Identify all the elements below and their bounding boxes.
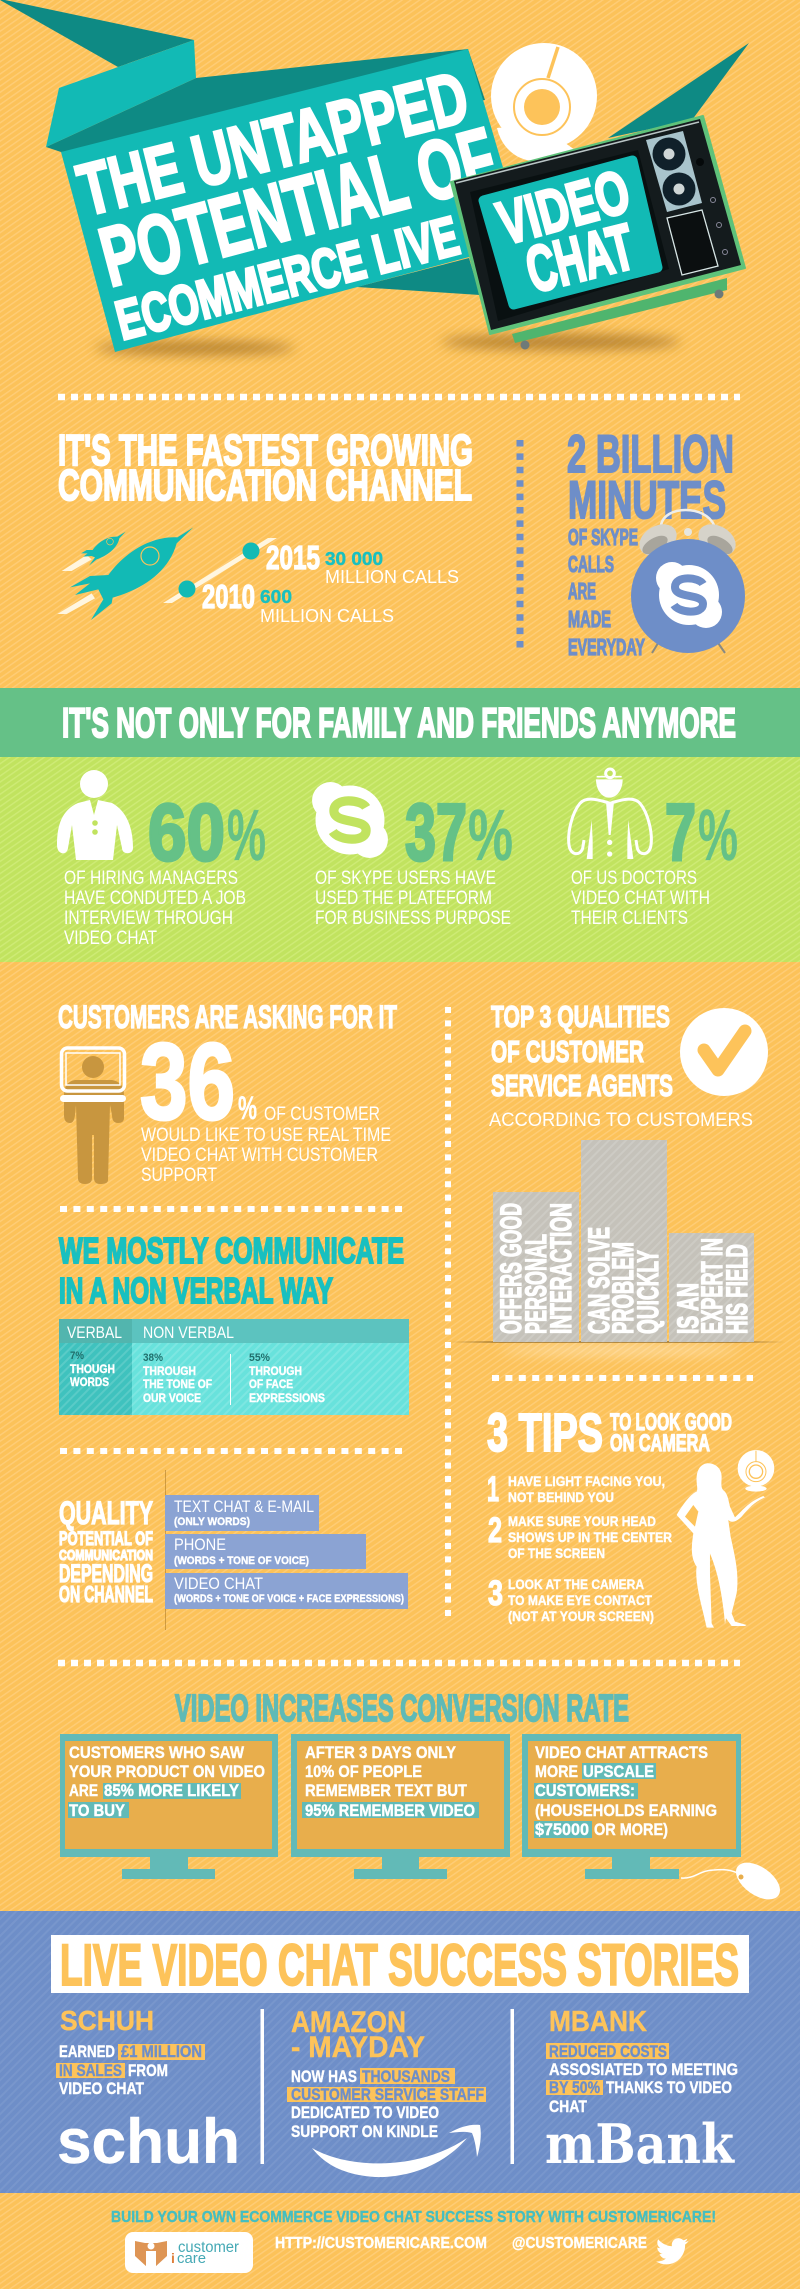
text: OF SKYPE xyxy=(568,524,638,550)
heading: COMMUNICATION xyxy=(59,1547,153,1564)
panel: success stories xyxy=(0,1911,800,2193)
divider xyxy=(492,1375,753,1381)
table: VERBAL xyxy=(67,1323,122,1342)
monitor 3: $75000 xyxy=(535,1821,589,1839)
story: schuh: VIDEO CHAT xyxy=(59,2079,145,2098)
heading xyxy=(59,1230,404,1311)
panel: quality by channel xyxy=(59,1470,408,1630)
stat: 2015: 30 000 xyxy=(325,549,383,569)
monitor 2: 10% OF PEOPLE xyxy=(305,1763,422,1781)
bar: text chat: (ONLY WORDS) xyxy=(174,1516,250,1528)
stat: hiring managers xyxy=(57,770,266,949)
logo: customer i care: customer xyxy=(178,2239,239,2256)
icon: person behind monitor xyxy=(60,1048,126,1184)
main banner xyxy=(61,49,525,352)
heading: TOP 3 QUALITIES xyxy=(491,999,670,1034)
heading: QUALITY xyxy=(59,1495,153,1531)
bar: text chat xyxy=(165,1495,319,1531)
story: amazon: NOW HAS xyxy=(291,2067,357,2086)
story: mbank: CHAT xyxy=(549,2097,588,2116)
panel: video increases conversion xyxy=(60,1688,787,1907)
divider xyxy=(58,394,740,400)
stat: skype users: % xyxy=(468,796,513,876)
heading: POTENTIAL OF xyxy=(59,1529,153,1550)
bar chart: HIS FIELD xyxy=(721,1244,754,1334)
tip 2: OF THE SCREEN xyxy=(508,1546,605,1561)
text: ARE xyxy=(568,578,596,604)
banner shadows xyxy=(95,334,681,355)
heading: ON CHANNEL xyxy=(59,1581,153,1607)
monitor 3: CUSTOMERS: xyxy=(535,1782,635,1800)
stat: 36%: WOULD LIKE TO USE REAL TIME xyxy=(141,1125,391,1146)
bar chart: OFFERS GOOD xyxy=(495,1203,528,1334)
monitor 3: OR MORE) xyxy=(594,1821,668,1839)
table: THROUGH xyxy=(143,1364,196,1378)
stat: 2010 xyxy=(202,578,394,626)
monitor 1: 85% MORE LIKELY xyxy=(104,1782,239,1800)
title text: THE UNTAPPED xyxy=(70,57,476,232)
call to action: BUILD YOUR OWN ECOMMERCE VIDEO CHAT SUCCESS STORY WITH CUSTOMERICARE! xyxy=(111,2209,716,2226)
stat: hiring managers: VIDEO CHAT xyxy=(64,928,157,949)
table: OUR VOICE xyxy=(143,1391,201,1405)
stat: 36% xyxy=(140,1021,391,1186)
monitor 1: CUSTOMERS WHO SAW xyxy=(69,1744,244,1762)
monitor 1: ARE xyxy=(69,1782,98,1800)
table: EXPRESSIONS xyxy=(249,1391,325,1405)
tip 3: 3 xyxy=(488,1574,503,1613)
story: mbank: REDUCED COSTS xyxy=(549,2042,667,2061)
stat: 36%: 36 xyxy=(140,1021,235,1143)
bar chart: CAN SOLVE xyxy=(583,1227,616,1334)
ribbon folds xyxy=(0,0,749,295)
stat: doctors: THEIR CLIENTS xyxy=(571,908,688,929)
story: schuh: £1 MILLION xyxy=(121,2042,202,2061)
tip 1: NOT BEHIND YOU xyxy=(508,1490,614,1505)
stat: 36%: SUPPORT xyxy=(141,1165,217,1186)
stat: 2015: MILLION CALLS xyxy=(325,567,459,587)
story: mbank: ASSOSIATED TO MEETING xyxy=(549,2060,738,2079)
bar chart: EXPERT IN xyxy=(696,1238,729,1334)
bar chart: QUICKLY xyxy=(632,1250,665,1334)
stat: doctors: OF US DOCTORS xyxy=(571,868,697,889)
divider xyxy=(60,1206,402,1212)
story: amazon xyxy=(287,2006,486,2177)
bar chart xyxy=(450,1140,785,1356)
stat: 2015: 2015 xyxy=(266,539,320,576)
monitor 2: AFTER 3 DAYS ONLY xyxy=(305,1744,456,1762)
monitor 2: 95% REMEMBER VIDEO xyxy=(305,1802,475,1820)
monitor 1 xyxy=(60,1734,278,1879)
tip 3 xyxy=(488,1574,654,1624)
logo: amazon smile xyxy=(312,2125,481,2177)
logo: customer i care: care xyxy=(177,2250,206,2267)
table: THOUGH xyxy=(70,1362,115,1376)
stat: hiring managers: % xyxy=(227,796,266,876)
table: THROUGH xyxy=(249,1364,302,1378)
panel: fastest growing channel xyxy=(57,426,473,626)
tip 2: MAKE SURE YOUR HEAD xyxy=(508,1514,656,1529)
story: mbank: BY 50% xyxy=(549,2078,600,2097)
story: schuh: EARNED xyxy=(59,2042,115,2061)
story: amazon: THOUSANDS xyxy=(362,2067,450,2086)
stat: skype users: 37 xyxy=(405,788,467,878)
logo: schuh: schuh xyxy=(57,2107,240,2177)
panel: customers asking xyxy=(58,999,397,1186)
stat: 2010: MILLION CALLS xyxy=(260,606,394,626)
stat: skype users: FOR BUSINESS PURPOSE xyxy=(315,908,511,929)
tip 2 xyxy=(488,1511,672,1561)
story: schuh: SCHUH xyxy=(60,2005,154,2036)
stat: hiring managers: 60 xyxy=(148,788,225,878)
heading xyxy=(489,999,753,1131)
monitor 3: UPSCALE xyxy=(583,1763,654,1781)
icon: doctor xyxy=(569,769,651,859)
stat: 2015 xyxy=(266,539,459,587)
story: mbank: MBANK xyxy=(549,2006,647,2038)
icon: mouse xyxy=(681,1855,787,1907)
monitor 2 xyxy=(291,1734,510,1879)
story: mbank: THANKS TO VIDEO xyxy=(606,2078,732,2097)
stat: doctors: 7 xyxy=(665,788,696,878)
panel: non verbal communication xyxy=(59,1230,409,1415)
tip 3: LOOK AT THE CAMERA xyxy=(508,1577,644,1592)
bar: phone: (WORDS + TONE OF VOICE) xyxy=(174,1555,309,1567)
heading xyxy=(567,425,734,530)
bar: phone xyxy=(165,1534,366,1569)
logo: customer i care: i xyxy=(171,2250,175,2266)
logo: mbank: mBank xyxy=(545,2112,735,2176)
story: schuh: IN SALES xyxy=(59,2061,122,2080)
logo: customer i care xyxy=(125,2232,253,2273)
stat: skype users: USED THE PLATEFORM xyxy=(315,888,492,909)
tip 3: (NOT AT YOUR SCREEN) xyxy=(508,1609,654,1624)
panel: top 3 qualities xyxy=(450,999,785,1356)
heading: TO LOOK GOOD xyxy=(610,1409,732,1436)
heading: IN A NON VERBAL WAY xyxy=(59,1270,333,1311)
divider vertical xyxy=(445,1007,451,1616)
divider xyxy=(60,1448,402,1454)
title text: ECOMMERCE LIVE xyxy=(110,204,465,352)
story: amazon: CUSTOMER SERVICE STAFF xyxy=(291,2085,484,2104)
heading xyxy=(487,1403,732,1463)
table: 55% xyxy=(249,1352,270,1364)
heading: ON CAMERA xyxy=(610,1430,710,1457)
icon: alarm clock with skype logo xyxy=(631,510,745,653)
heading: MINUTES xyxy=(568,471,726,530)
panel: business stats xyxy=(0,757,800,962)
story: amazon: - MAYDAY xyxy=(291,2031,425,2064)
monitor 3: MORE xyxy=(535,1763,578,1781)
stat: doctors: VIDEO CHAT WITH xyxy=(571,888,710,909)
heading xyxy=(58,426,473,510)
text: EVERYDAY xyxy=(568,634,645,660)
bar chart: PROBLEM xyxy=(607,1242,640,1334)
bar: video chat xyxy=(165,1573,408,1609)
stat: 36%: VIDEO CHAT WITH CUSTOMER xyxy=(141,1145,378,1166)
text xyxy=(568,524,645,660)
text: MADE xyxy=(568,606,611,632)
icon: rockets xyxy=(57,527,193,620)
panel: 3 tips xyxy=(487,1403,774,1628)
timeline xyxy=(163,538,277,603)
story: amazon: DEDICATED TO VIDEO xyxy=(291,2103,439,2122)
divider xyxy=(58,1660,740,1666)
heading: COMMUNICATION CHANNEL xyxy=(58,461,472,510)
table: THE TONE OF xyxy=(143,1377,212,1391)
stat: 2010: 600 xyxy=(260,587,292,607)
monitor 2: REMEMBER TEXT BUT xyxy=(305,1782,467,1800)
story: mbank xyxy=(545,2006,738,2176)
icon: television xyxy=(451,116,745,350)
story: amazon: SUPPORT ON KINDLE xyxy=(291,2122,438,2141)
table: 38% xyxy=(143,1352,163,1364)
stat: skype users: OF SKYPE USERS HAVE xyxy=(315,868,496,889)
screen text: VIDEO xyxy=(490,157,637,258)
tip 1: 1 xyxy=(487,1470,499,1509)
twitter handle: @CUSTOMERICARE xyxy=(512,2235,647,2252)
stat: 36%: OF CUSTOMER xyxy=(264,1104,380,1125)
heading: IT'S THE FASTEST GROWING xyxy=(58,426,473,475)
band: family and friends heading xyxy=(0,688,800,757)
bar: video chat: VIDEO CHAT xyxy=(174,1574,263,1593)
heading: SERVICE AGENTS xyxy=(491,1068,673,1103)
bar chart: IS AN xyxy=(672,1283,705,1334)
website: HTTP://CUSTOMERICARE.COM xyxy=(275,2235,487,2252)
tip 1 xyxy=(487,1470,665,1509)
tip 2: 2 xyxy=(488,1511,502,1550)
table: NON VERBAL xyxy=(143,1323,234,1342)
heading: OF CUSTOMER xyxy=(491,1034,644,1069)
icon: skype logo xyxy=(312,782,388,858)
screen text xyxy=(490,157,641,307)
table xyxy=(59,1319,409,1415)
tip 3: TO MAKE EYE CONTACT xyxy=(508,1593,653,1608)
stat: hiring managers: HAVE CONDUTED A JOB xyxy=(64,888,246,909)
title banner xyxy=(0,0,749,355)
panel: 2 billion minutes xyxy=(567,425,745,660)
icon: twitter bird xyxy=(656,2238,688,2264)
stat: 36%: % xyxy=(238,1090,257,1126)
monitor 1: TO BUY xyxy=(69,1802,125,1820)
heading: DEPENDING xyxy=(59,1560,153,1588)
tip 1: HAVE LIGHT FACING YOU, xyxy=(508,1474,665,1489)
tip 2: SHOWS UP IN THE CENTER xyxy=(508,1530,672,1545)
story: schuh: FROM xyxy=(128,2061,168,2080)
text: CALLS xyxy=(568,551,614,577)
icon: woman holding webcam xyxy=(677,1450,774,1628)
heading: WE MOSTLY COMMUNICATE xyxy=(59,1230,404,1271)
monitor 3: VIDEO CHAT ATTRACTS xyxy=(535,1744,708,1762)
stat: doctors: % xyxy=(698,796,738,876)
icon: webcam xyxy=(491,43,597,161)
table: WORDS xyxy=(70,1375,109,1389)
heading: ACCORDING TO CUSTOMERS xyxy=(489,1110,753,1131)
monitor 1: YOUR PRODUCT ON VIDEO xyxy=(69,1763,265,1781)
bar: phone: PHONE xyxy=(174,1535,226,1554)
table: 7% xyxy=(70,1350,84,1362)
screen text: CHAT xyxy=(519,210,641,307)
stat: hiring managers: INTERVIEW THROUGH xyxy=(64,908,233,929)
table: OF FACE xyxy=(249,1377,293,1391)
footer xyxy=(111,2209,716,2273)
stat: skype users xyxy=(312,782,513,929)
stat: doctors xyxy=(569,769,738,929)
heading xyxy=(59,1495,153,1607)
title text: POTENTIAL OF xyxy=(90,110,505,304)
monitor 3 xyxy=(522,1734,741,1879)
story: amazon: AMAZON xyxy=(291,2006,406,2039)
stat: 2010: 2010 xyxy=(202,578,255,615)
bar: video chat: (WORDS + TONE OF VOICE + FACE EXPRESSIONS) xyxy=(174,1593,404,1605)
divider vertical xyxy=(516,440,524,648)
icon: check mark xyxy=(680,1008,768,1096)
title text xyxy=(70,57,505,352)
stat: hiring managers: OF HIRING MANAGERS xyxy=(64,868,238,889)
heading: 3 TIPS xyxy=(487,1403,603,1463)
story: schuh xyxy=(56,2005,240,2177)
monitor 3: (HOUSEHOLDS EARNING xyxy=(535,1802,717,1820)
heading: CUSTOMERS ARE ASKING FOR IT xyxy=(58,999,397,1035)
bar: text chat: TEXT CHAT & E-MAIL xyxy=(174,1497,314,1516)
icon: manager xyxy=(57,770,133,860)
bar chart: INTERACTION xyxy=(545,1203,578,1334)
bar chart: PERSONAL xyxy=(520,1234,553,1334)
